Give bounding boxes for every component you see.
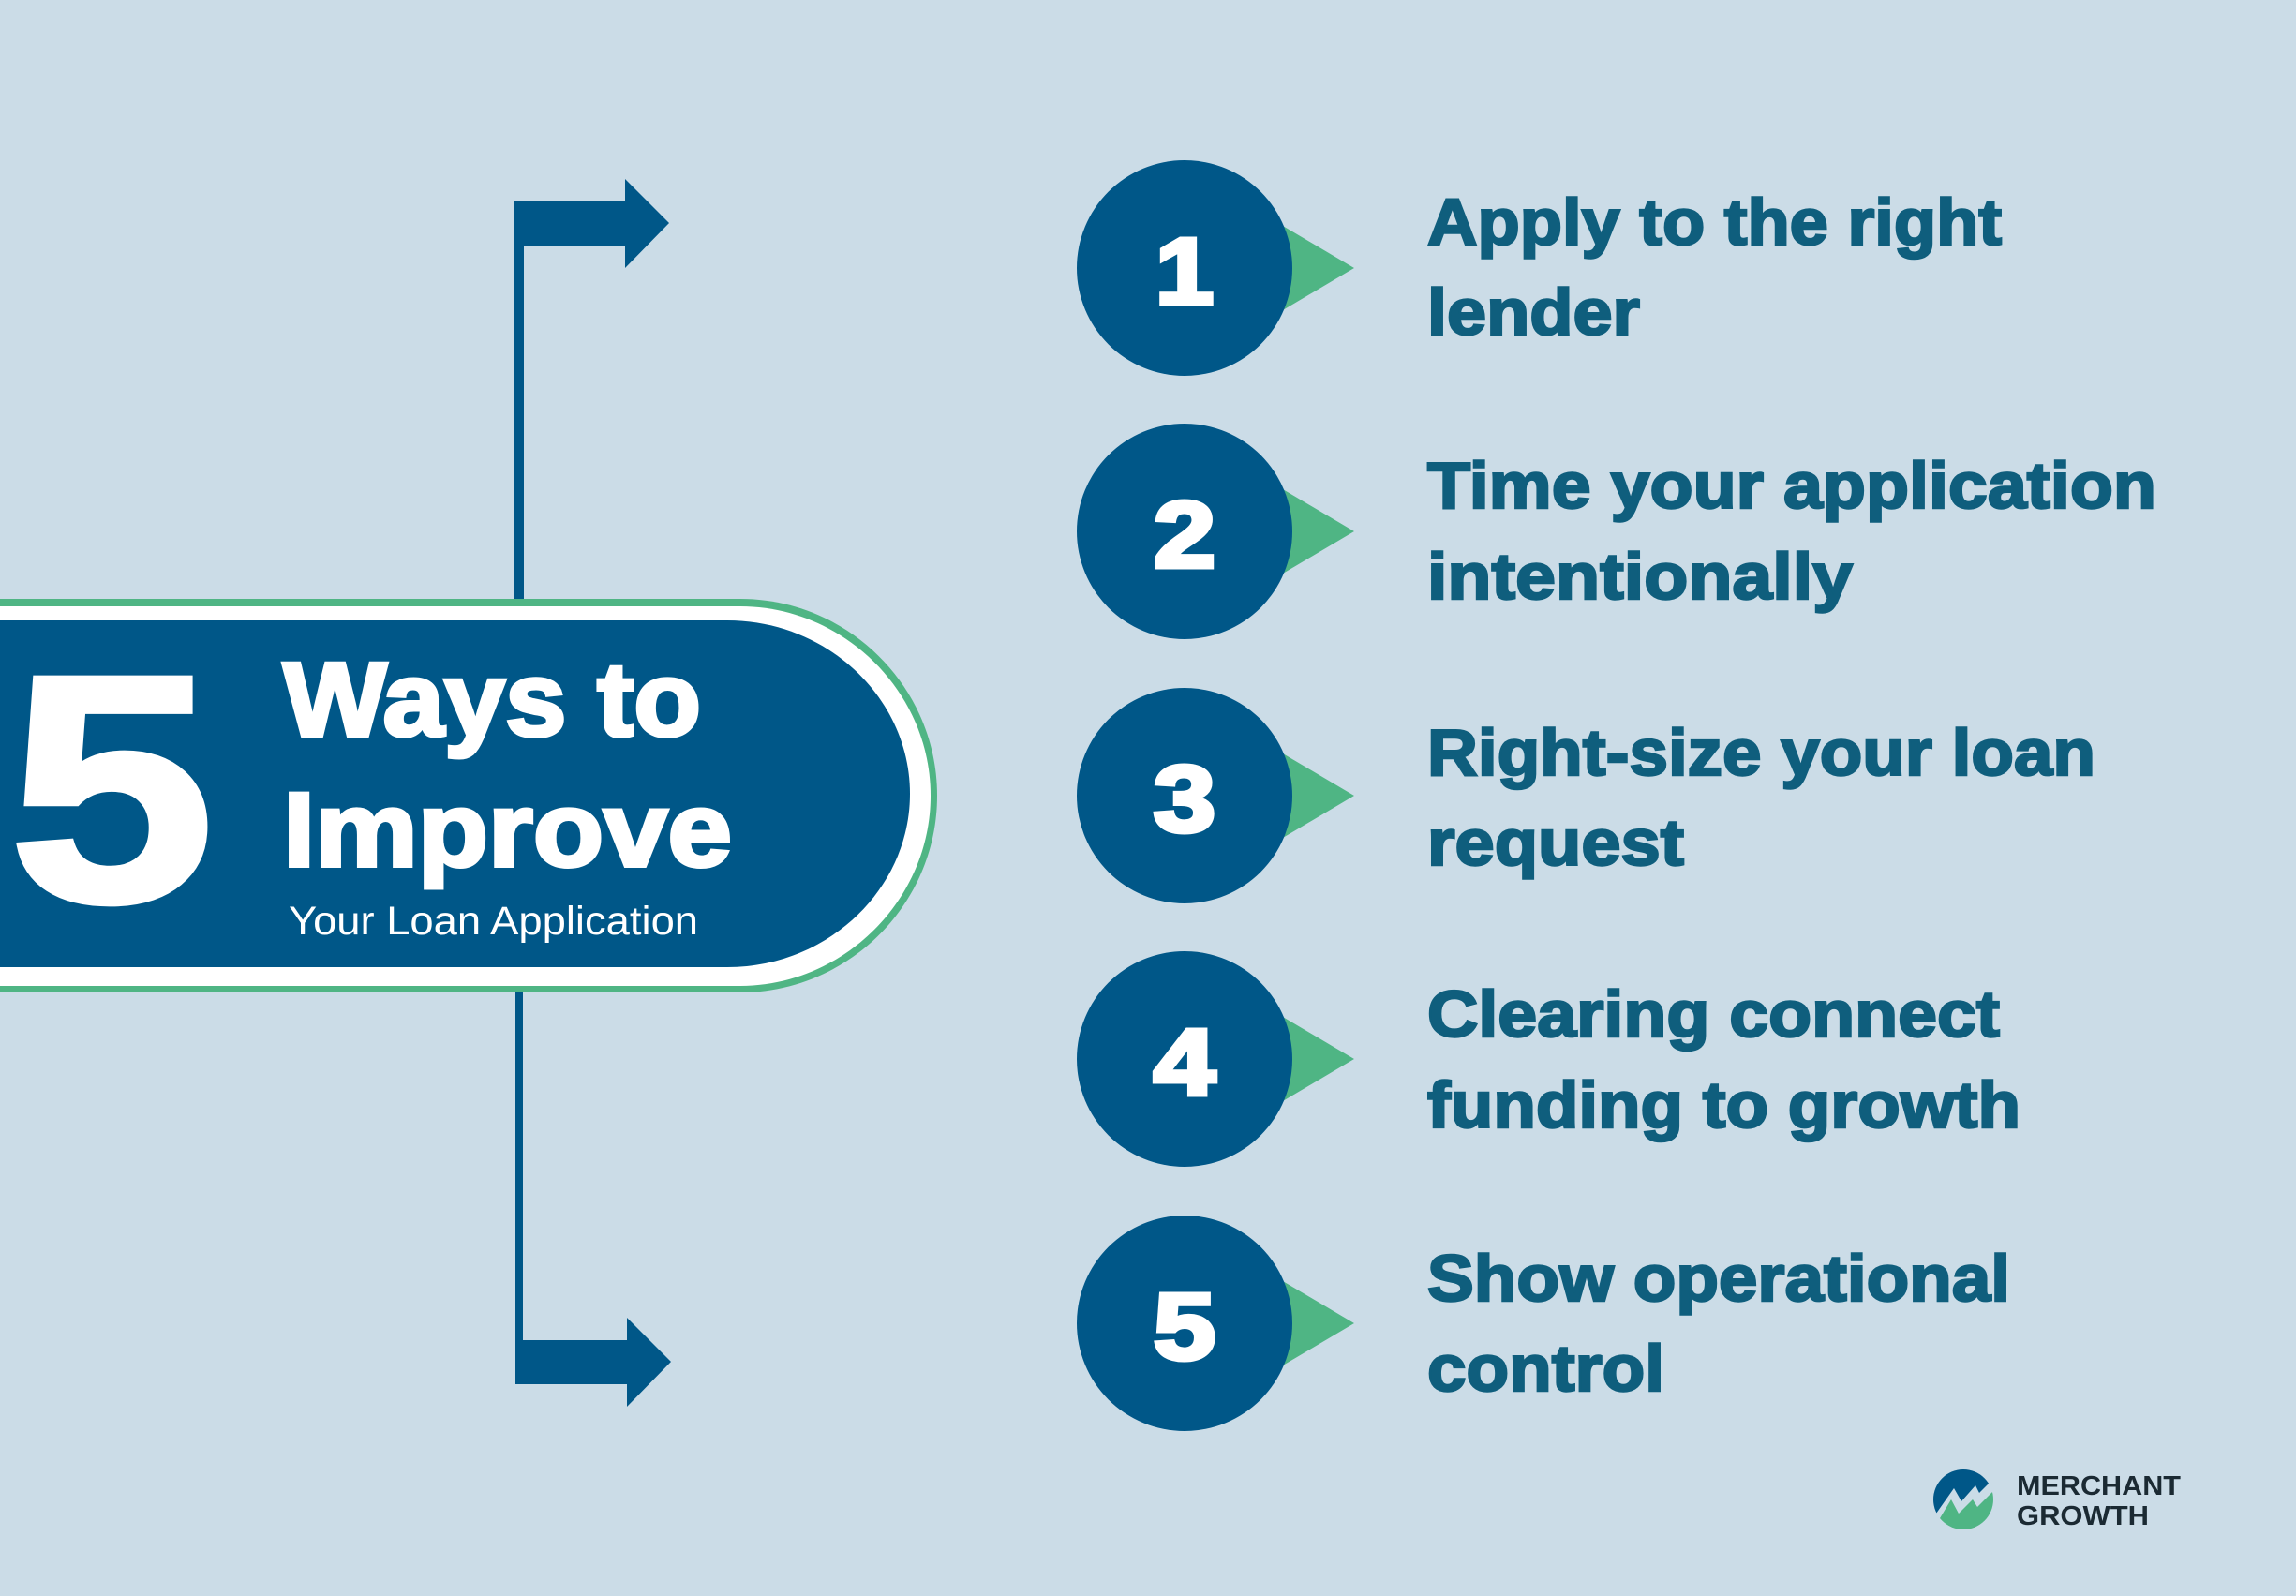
pointer 2 [1256, 473, 1354, 589]
number 4: 4 [1154, 1010, 1215, 1115]
logo icon [1933, 1469, 1993, 1529]
step 5 text: Show operational [1427, 1242, 2010, 1315]
step 2 text: Time your application [1427, 449, 2156, 522]
logo: Merchant Growth [1933, 1469, 2181, 1529]
step 3 text: request [1427, 806, 1684, 879]
number 5: 5 [1154, 1275, 1215, 1380]
step 1 [1077, 160, 2002, 376]
step 3 [1077, 688, 2095, 903]
logo wordmark: GROWTH [2017, 1501, 2149, 1531]
step 5 text: control [1427, 1332, 1664, 1405]
banner blue fill [0, 620, 910, 967]
step 1 text: lender [1427, 276, 1640, 349]
step 2 [1077, 424, 2156, 639]
step 4 text: funding to growth [1427, 1068, 2020, 1141]
number 3: 3 [1154, 747, 1215, 852]
badge 2 [1077, 424, 1292, 639]
arrow: top [514, 179, 669, 604]
number 1: 1 [1155, 219, 1214, 324]
pointer 5 [1256, 1265, 1354, 1381]
subtitle: Your Loan Application [289, 899, 698, 944]
banner white border [0, 606, 931, 986]
badge 4 [1077, 951, 1292, 1167]
title banner [0, 599, 937, 992]
big numeral 5: 5 [8, 609, 215, 970]
pointer 3 [1256, 738, 1354, 854]
step 4 [1077, 951, 2020, 1167]
step 3 text: Right-size your loan [1427, 716, 2095, 789]
badge 5 [1077, 1216, 1292, 1431]
number 2: 2 [1154, 483, 1215, 588]
badge 1 [1077, 160, 1292, 376]
step 5 [1077, 1216, 2010, 1431]
badge 3 [1077, 688, 1292, 903]
pointer 1 [1256, 210, 1354, 326]
pointer 4 [1256, 1001, 1354, 1117]
title line 2: Improve [283, 771, 732, 888]
arrow: bottom [515, 984, 671, 1407]
step 1 text: Apply to the right [1427, 186, 2002, 259]
step 2 text: intentionally [1427, 540, 1853, 613]
title line 1: Ways to [283, 641, 701, 758]
logo wordmark: MERCHANT [2017, 1471, 2181, 1501]
step 4 text: Clearing connect [1427, 977, 2000, 1051]
banner outer outline [0, 599, 937, 992]
